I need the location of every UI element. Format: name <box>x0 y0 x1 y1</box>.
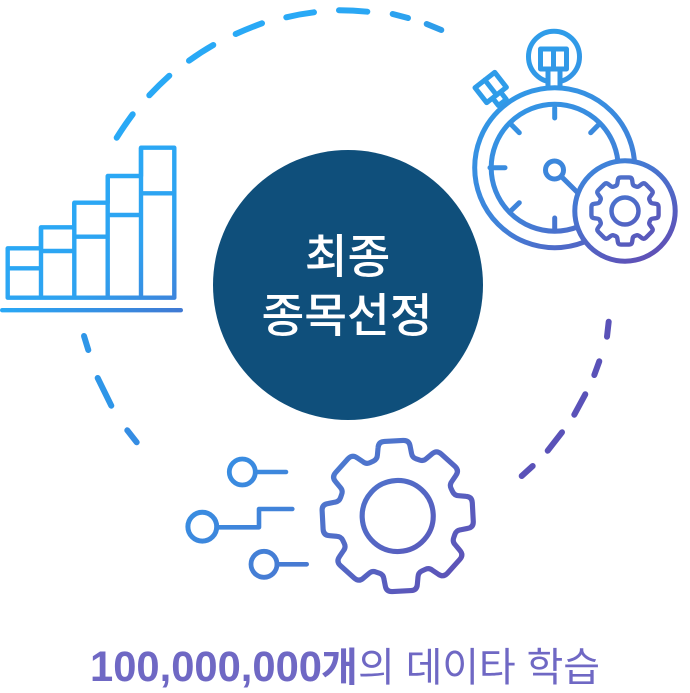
icon: stopwatch with gear <box>475 31 675 261</box>
dashed ring: lower left arc <box>84 336 137 442</box>
icon: circuit lines <box>188 459 307 577</box>
caption: 의 데이타 학습 <box>358 646 600 690</box>
caption: 100,000,000 <box>90 643 322 691</box>
center circle with title: 최종 <box>305 231 390 283</box>
center circle with title: 종목선정 <box>261 290 433 342</box>
icon: bar chart <box>0 148 183 312</box>
chart axis <box>0 308 183 312</box>
caption <box>90 643 600 691</box>
icon: small gear <box>591 177 659 245</box>
icon: large gear <box>319 437 477 595</box>
center circle with title <box>213 150 483 420</box>
dashed ring: lower right arc <box>522 322 609 476</box>
dashed ring: top arc <box>117 10 441 138</box>
caption: 개 <box>321 646 358 690</box>
